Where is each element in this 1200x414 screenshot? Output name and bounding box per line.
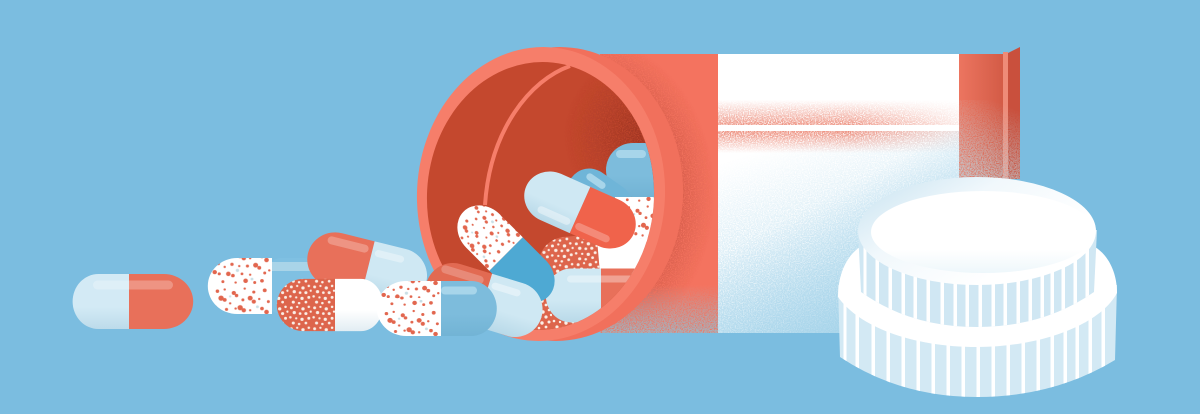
pill: blue top right [606, 143, 654, 197]
cap lid top [858, 177, 1096, 285]
bottle red end with lip [959, 47, 1020, 179]
pill: far left pale blue and red [73, 274, 193, 329]
bottle body [600, 47, 1020, 333]
cap upper ribbed ring [858, 230, 1097, 327]
bottle mouth [409, 41, 691, 347]
illustration: spilled pill bottle [72, 47, 1117, 397]
pill: dense speckle and white [277, 279, 383, 331]
pill: red and pale blue behind front pill [419, 256, 549, 344]
bottle white label [718, 54, 959, 333]
pill: speckled far right [615, 197, 654, 242]
cap lower ribbed ring [838, 285, 1117, 397]
pill: speckled with translucent half [208, 258, 317, 314]
pill: red and pale blue mid [301, 226, 433, 309]
bottle interior [420, 56, 661, 336]
interior ridge line [485, 66, 570, 205]
pill: speckled and blue front [377, 281, 497, 336]
pill: blue behind [571, 168, 631, 211]
pill: light blue and red at front of bottle [546, 268, 635, 322]
cap white rim [838, 247, 1117, 347]
pill: blue and red tilted [516, 163, 644, 257]
pill: speckled and blue diagonal [447, 195, 565, 313]
outer rim [409, 41, 673, 347]
bottle neck coral section [600, 54, 718, 333]
pill: dense speckle with white [540, 236, 648, 276]
interior shadow [420, 56, 661, 336]
pill: speckled bottom [534, 298, 579, 330]
cap lid inner disc [871, 191, 1095, 273]
bottle cap [830, 177, 1125, 405]
neck ring behind rim [425, 41, 691, 347]
pills inside bottle [534, 143, 654, 330]
